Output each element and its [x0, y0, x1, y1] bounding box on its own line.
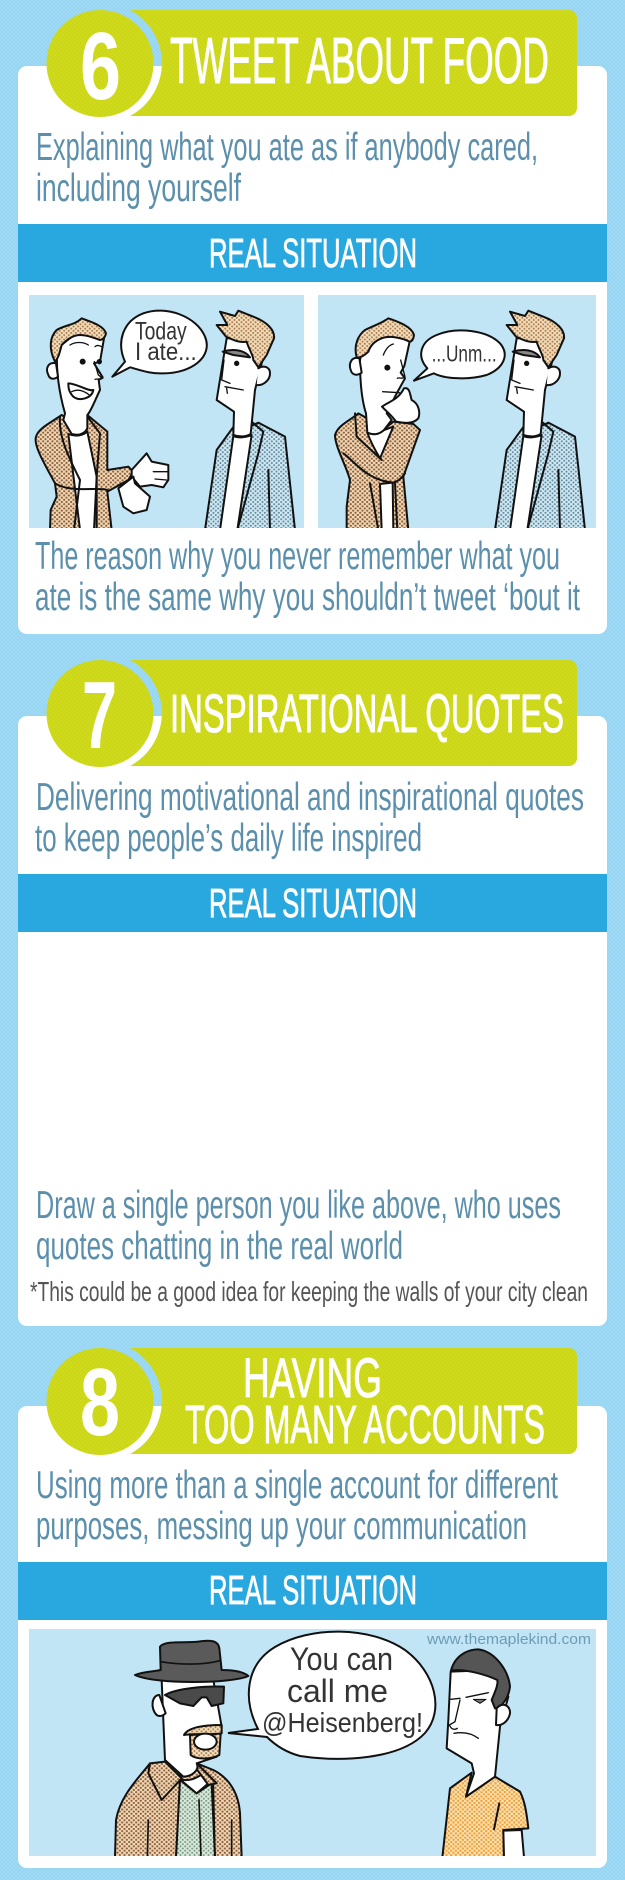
band: real situation 8: REAL SITUATION: [209, 1567, 417, 1613]
listener with jacket: [205, 311, 295, 530]
panel: tip 8 too many accounts: [18, 1346, 607, 1868]
band: real situation 8: [18, 1562, 607, 1620]
speech bubble: You can call me: You can: [290, 1641, 393, 1677]
heading banner 8: HAVING: [243, 1346, 382, 1409]
speech bubble: Today I ate: Today: [135, 318, 187, 345]
comic panel: Unm: [318, 295, 596, 530]
heading banner 8: [46, 1346, 577, 1456]
band: real situation 6: REAL SITUATION: [209, 230, 417, 276]
thinking person: [335, 318, 420, 530]
heading banner 6: 6: [80, 13, 121, 120]
description 8: [36, 1464, 558, 1548]
speech bubble: You can call me: [228, 1632, 435, 1759]
panel: tip 6 tweet about food: [18, 10, 607, 634]
heading banner 7: 7: [82, 662, 117, 769]
heading banner 6: [46, 10, 577, 120]
speech bubble: Unm: [414, 330, 505, 381]
speech bubble: You can call me: @Heisenberg!: [262, 1707, 423, 1738]
speaker with jacket: [36, 318, 168, 530]
instruction 7: quotes chatting in the real world: [36, 1225, 403, 1268]
comic panel: Today I ate: [29, 295, 304, 530]
listener repeated: [495, 311, 585, 530]
grumpy character: [442, 1649, 528, 1857]
description 6: including yourself: [36, 167, 241, 210]
speech bubble: Today I ate: [112, 311, 207, 377]
instruction 7: [36, 1184, 561, 1268]
comic panel: Heisenberg: [29, 1629, 596, 1857]
Heisenberg character: [115, 1641, 248, 1857]
band: real situation 6: [18, 224, 607, 282]
conclusion 6: [35, 535, 580, 619]
panel: tip 7 inspirational quotes: [18, 660, 607, 1326]
band: real situation 7: [18, 874, 607, 932]
heading banner 8: 8: [80, 1349, 120, 1456]
speech bubble: Unm: ...Unm...: [432, 341, 497, 367]
band: real situation 7: REAL SITUATION: [209, 880, 417, 926]
watermark: www.themaplekind.com: [426, 1631, 591, 1648]
description 6: [36, 126, 538, 210]
speech bubble: Today I ate: I ate...: [135, 339, 197, 366]
speech bubble: You can call me: call me: [287, 1673, 388, 1709]
description 7: to keep people’s daily life inspired: [35, 817, 422, 860]
description 7: [35, 776, 584, 860]
heading banner 7: [46, 660, 577, 769]
